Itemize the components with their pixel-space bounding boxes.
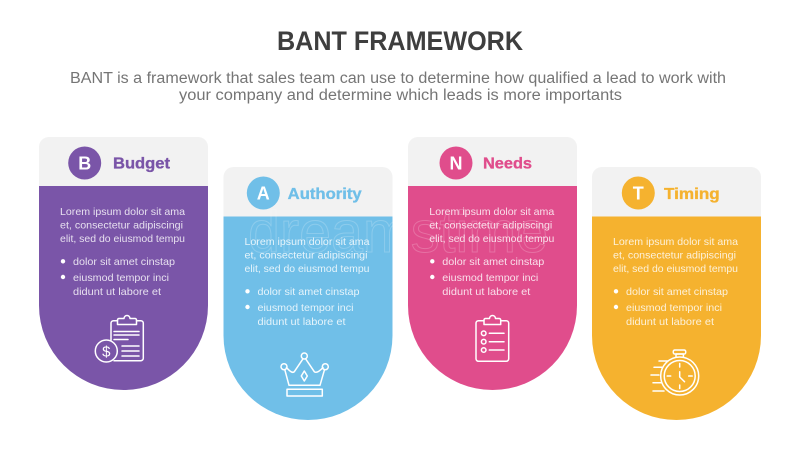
badge: B: B [78, 154, 91, 174]
bullet list: authority: didunt ut labore et [258, 316, 346, 328]
card body: budget [39, 186, 208, 390]
title: BANT FRAMEWORK [277, 26, 523, 56]
badge: N: N [450, 154, 462, 174]
panel: budget [39, 137, 208, 390]
bullet list: timing [614, 286, 728, 328]
icon: clipboard with dollar coin [95, 316, 143, 362]
badge: T [622, 176, 655, 210]
text block: timing description: et, consectetur adipiscingi [613, 250, 736, 262]
badge: A: A [257, 184, 270, 204]
text block: needs description [429, 206, 554, 245]
bullet list: authority [245, 286, 360, 328]
text block: budget description: Lorem ipsum dolor sit ama [60, 206, 185, 218]
card body: timing [592, 216, 761, 420]
badge: A [247, 176, 280, 210]
bullet list: needs: didunt ut labore et [442, 286, 530, 298]
card header: authority [224, 167, 392, 216]
icon: stopwatch [651, 350, 699, 395]
subtitle: your company and determine which leads is more importants [179, 87, 622, 104]
text block: authority description [244, 236, 370, 275]
bullet list: budget: didunt ut labore et [73, 286, 161, 298]
icon: clipboard with dollar coin: $ [102, 344, 111, 360]
bullet list: budget [61, 256, 175, 298]
text block: authority description: elit, sed do eiusmod tempu [244, 263, 370, 275]
text block: needs description: et, consectetur adipiscingi [429, 220, 552, 232]
panel: authority [224, 167, 392, 420]
text block: budget description: elit, sed do eiusmod tempu [60, 233, 185, 245]
text block: needs description: Lorem ipsum dolor sit ama [429, 206, 554, 218]
heading: Budget: Budget [113, 156, 170, 172]
icon: crown [281, 353, 328, 396]
text block: timing description: Lorem ipsum dolor sit ama [613, 236, 738, 248]
text block: budget description: et, consectetur adipiscingi [60, 220, 183, 232]
bullet list: timing: didunt ut labore et [626, 316, 714, 328]
subtitle [70, 70, 726, 104]
panel: needs [408, 137, 577, 390]
bullet list: timing: eiusmod tempor inci [626, 302, 722, 314]
bullet list: timing: dolor sit amet cinstap [626, 286, 728, 298]
badge: N [440, 146, 472, 180]
card header: timing [592, 167, 761, 216]
bullet list: budget: dolor sit amet cinstap [73, 256, 175, 268]
text block: authority description: Lorem ipsum dolor sit ama [244, 236, 370, 248]
bullet list: budget: eiusmod tempor inci [73, 272, 169, 284]
text block: timing description [613, 236, 738, 275]
icon: checklist clipboard [476, 316, 509, 361]
heading: Needs: Needs [483, 156, 532, 172]
heading: Authority: Authority [288, 186, 362, 203]
text block: needs description: elit, sed do eiusmod tempu [429, 233, 554, 245]
text block: budget description [60, 206, 185, 245]
bullet list: needs [430, 256, 544, 298]
badge: B [68, 146, 101, 180]
card body: authority [224, 216, 392, 420]
heading: Timing: Timing [664, 186, 720, 203]
card body: needs [408, 186, 577, 390]
bullet list: needs: dolor sit amet cinstap [442, 256, 544, 268]
bullet list: authority: eiusmod tempor inci [258, 302, 354, 314]
bullet list: authority: dolor sit amet cinstap [258, 286, 360, 298]
text block: authority description: et, consectetur adipiscingi [244, 250, 368, 262]
badge: T: T [633, 184, 644, 204]
text block: timing description: elit, sed do eiusmod tempu [613, 263, 738, 275]
card header: budget [39, 137, 208, 186]
subtitle: BANT is a framework that sales team can use to determine how qualified a lead to work with [70, 70, 726, 87]
panel: timing [592, 167, 761, 420]
watermark: dreamstime [248, 200, 548, 265]
bullet list: needs: eiusmod tempor inci [442, 272, 538, 284]
card header: needs [408, 137, 577, 186]
